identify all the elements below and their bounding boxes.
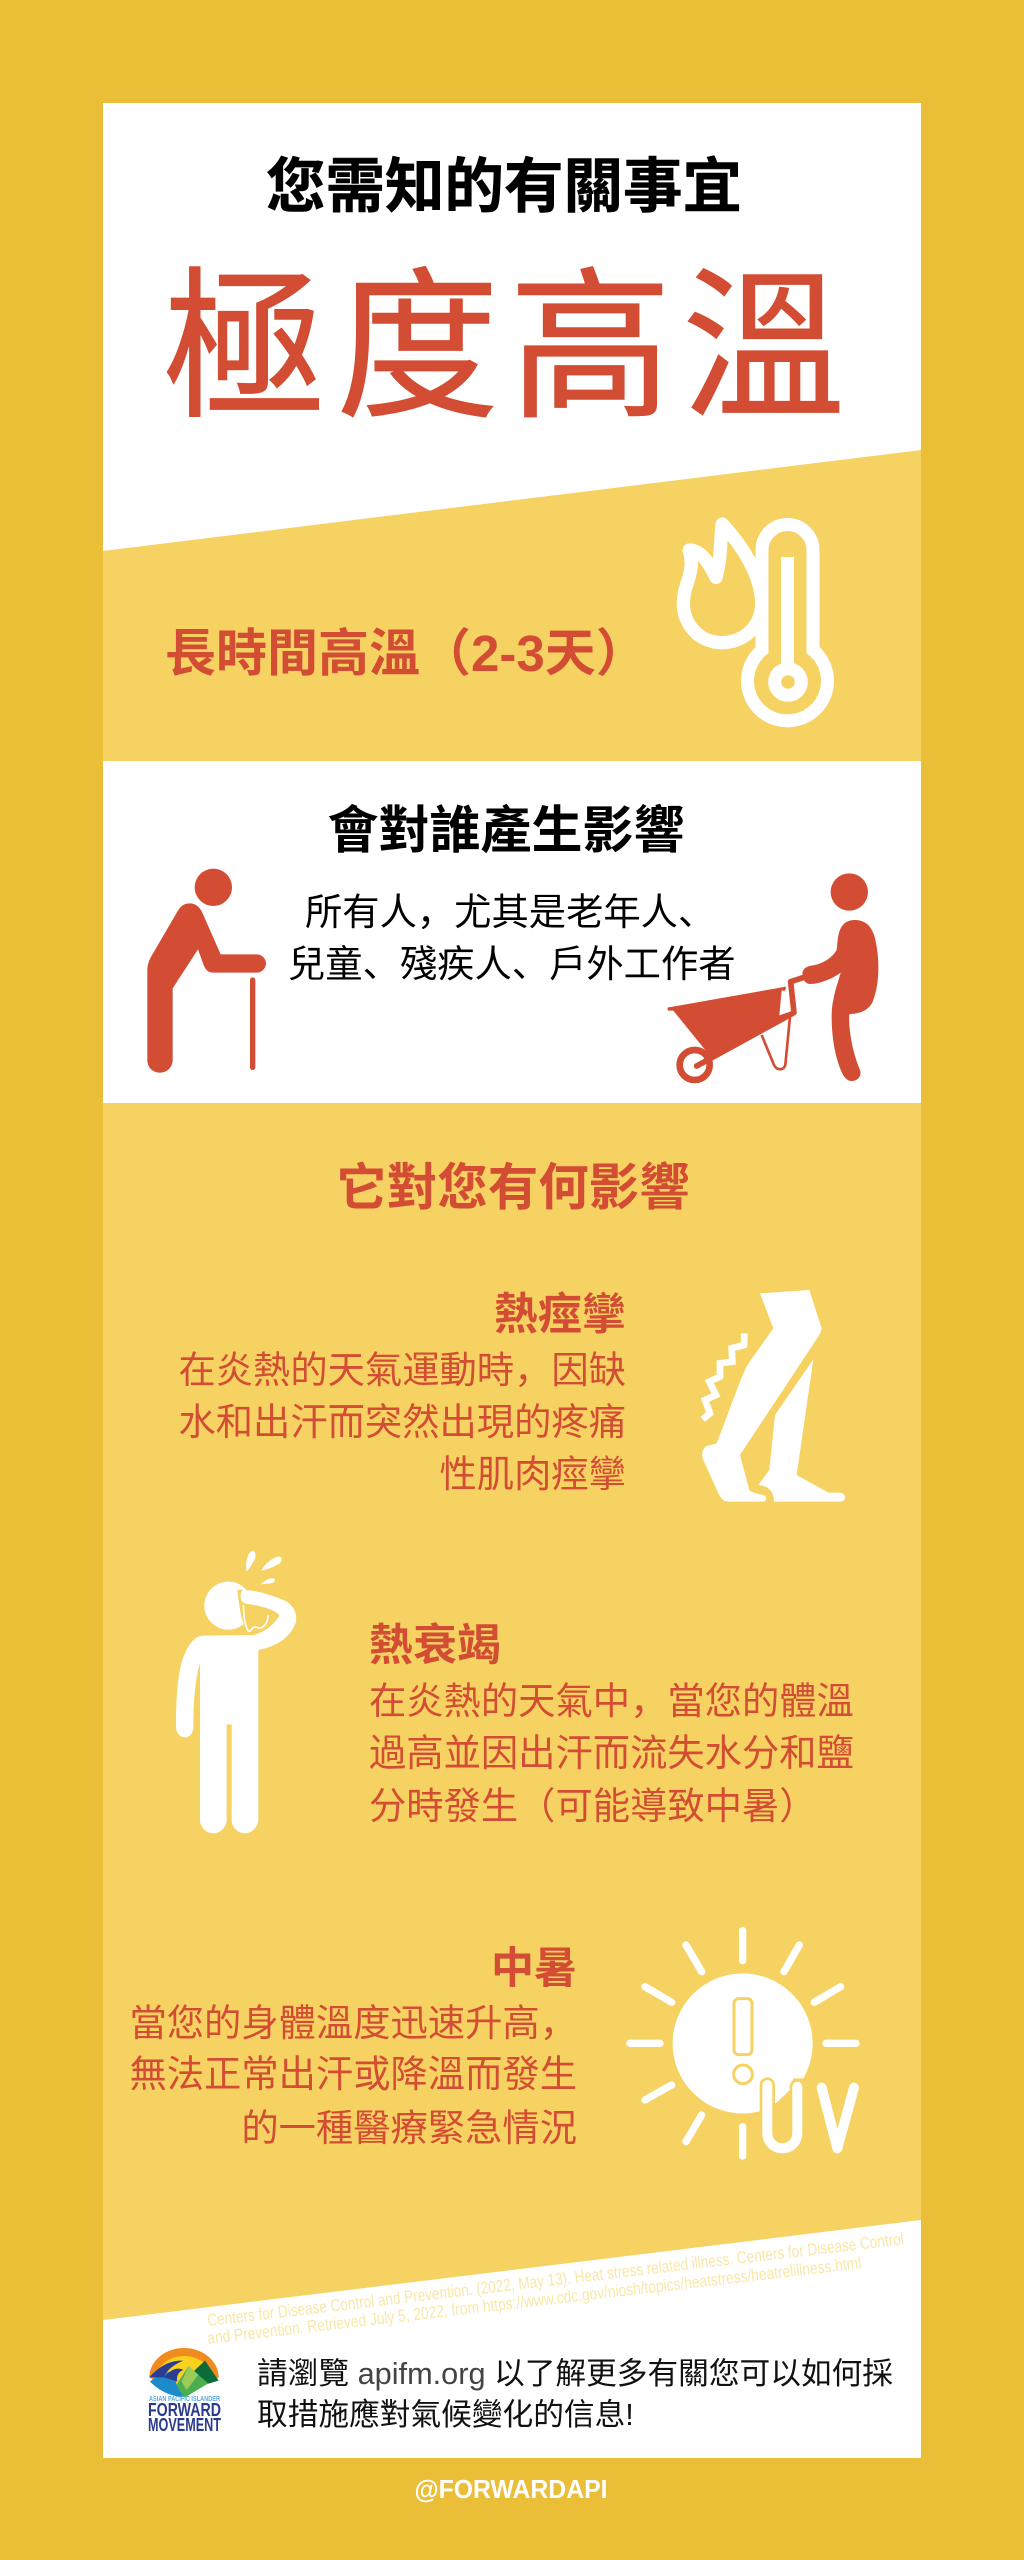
text: heat cramps: 性肌肉痙攣 xyxy=(440,1453,626,1495)
social handle: @FORWARDAPI xyxy=(414,2474,608,2504)
text: heat cramps xyxy=(178,1349,626,1495)
text: heat stroke: 無法正常出汗或降溫而發生 xyxy=(129,2053,577,2095)
text: who is affected xyxy=(288,891,736,985)
heading: heat stroke: 中暑 xyxy=(491,1945,577,1993)
panel: duration band xyxy=(103,450,921,761)
heading: how it affects you: 它對您有何影響 xyxy=(336,1159,690,1216)
text: heat stroke: 當您的身體溫度迅速升高， xyxy=(129,2002,577,2044)
text: heat exhaustion xyxy=(369,1680,854,1827)
section: heat exhaustion xyxy=(369,1621,854,1827)
text: visit website: 請瀏覽 apifm.org 以了解更多有關您可以如何採 xyxy=(257,2356,893,2391)
text: heat exhaustion: 過高並因出汗而流失水分和鹽 xyxy=(369,1732,854,1774)
text: visit website: 取措施應對氣候變化的信息! xyxy=(257,2397,634,2432)
icon: flame and thermometer xyxy=(683,524,827,721)
icon: worker with wheelbarrow xyxy=(667,873,878,1081)
icon: exhausted person wiping forehead xyxy=(176,1551,296,1833)
citation: and Prevention. Retrieved July 5, 2022, from https://www.cdc.gov/niosh/topics/heatstress/heatrelillness.html xyxy=(206,2253,862,2348)
heading: what you need to know: 您需知的有關事宜 xyxy=(266,153,742,220)
text: heat stroke: 的一種醫療緊急情況 xyxy=(241,2107,577,2149)
heading: prolonged heat: 長時間高溫（2-3天） xyxy=(165,625,647,682)
text: visit website xyxy=(257,2356,893,2432)
heading: who is affected: 會對誰產生影響 xyxy=(327,802,685,859)
logo text: ASIAN PACIFIC ISLANDER xyxy=(149,2396,220,2403)
text: heat cramps: 在炎熱的天氣運動時，因缺 xyxy=(178,1349,626,1391)
title: extreme heat: 極度高溫 xyxy=(163,256,855,439)
panel: main white card xyxy=(103,103,921,2458)
text: heat stroke xyxy=(129,2002,577,2149)
logo text: FORWARD xyxy=(148,2400,221,2420)
text: heat cramps: 水和出汗而突然出現的疼痛 xyxy=(178,1401,626,1443)
text: who is affected: 所有人，尤其是老年人、 xyxy=(305,891,715,933)
section: heat cramps xyxy=(178,1290,626,1495)
icon: elderly person with cane xyxy=(147,869,266,1073)
heading: heat cramps: 熱痙攣 xyxy=(494,1290,626,1339)
logo mark xyxy=(149,2348,219,2397)
text: who is affected: 兒童、殘疾人、戶外工作者 xyxy=(288,943,736,985)
text: heat exhaustion: 分時發生（可能導致中暑） xyxy=(369,1785,817,1827)
section: heat stroke xyxy=(129,1945,577,2149)
icon: leg cramp xyxy=(702,1290,845,1502)
logo: Asian Pacific Islander Forward Movement xyxy=(148,2348,221,2435)
heading: heat exhaustion: 熱衰竭 xyxy=(369,1621,501,1670)
panel: effects band xyxy=(103,1103,921,2320)
icon: sun with UV warning xyxy=(630,1931,856,2156)
text: heat exhaustion: 在炎熱的天氣中，當您的體溫 xyxy=(369,1680,854,1722)
logo text xyxy=(148,2396,221,2435)
logo text: MOVEMENT xyxy=(148,2415,221,2435)
